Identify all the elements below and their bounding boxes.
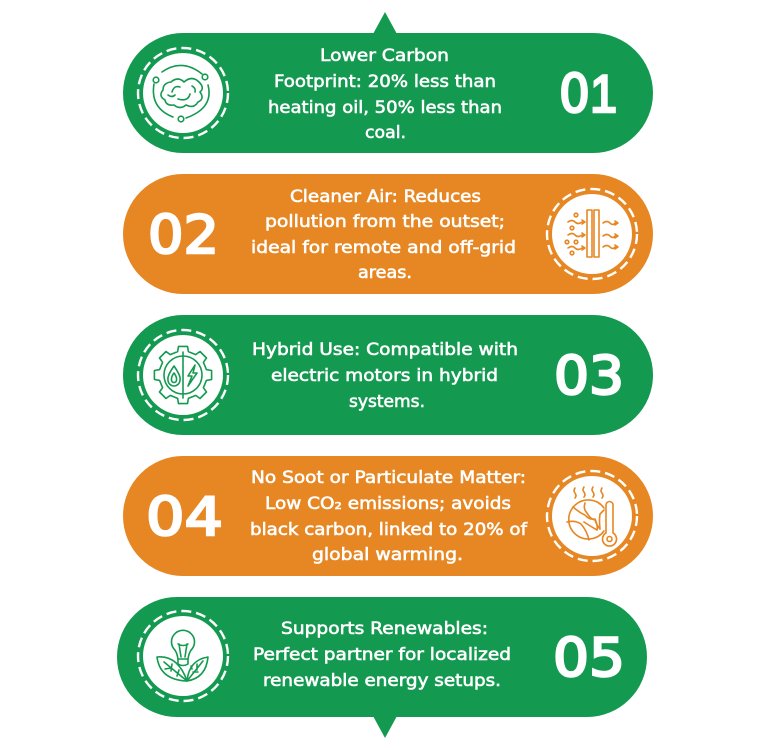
text: no soot: No Soot or Particulate Matter: bbox=[251, 468, 526, 488]
number 02: 02 bbox=[148, 205, 219, 266]
text: lower carbon footprint: Footprint: 20% less than bbox=[274, 72, 496, 92]
text: cleaner air: Cleaner Air: Reduces bbox=[290, 187, 481, 207]
text: no soot: black carbon, linked to 20% of bbox=[250, 520, 528, 540]
icon: cloud with orbit bbox=[138, 48, 228, 138]
text: hybrid use: electric motors in hybrid bbox=[271, 366, 498, 386]
text: supports renewables: renewable energy setups. bbox=[263, 671, 501, 691]
text: hybrid use bbox=[252, 340, 518, 412]
text: no soot: global warming. bbox=[312, 545, 463, 565]
number 04: 04 bbox=[146, 487, 223, 548]
text: cleaner air: ideal for remote and off-grid bbox=[251, 238, 516, 258]
icon: gear with drop and bolt bbox=[138, 330, 228, 420]
panel: hybrid use bbox=[123, 315, 653, 435]
top arrow bbox=[373, 12, 397, 34]
text: lower carbon footprint: heating oil, 50% less than bbox=[268, 98, 502, 118]
text: lower carbon footprint: coal. bbox=[365, 123, 406, 143]
text: no soot: Low CO₂ emissions; avoids bbox=[265, 494, 511, 514]
icon: air filter bbox=[547, 189, 637, 279]
text: hybrid use: Hybrid Use: Compatible with bbox=[252, 340, 518, 360]
text: no soot bbox=[250, 468, 528, 565]
text: supports renewables: Perfect partner for localized bbox=[253, 645, 511, 665]
text: lower carbon footprint: Lower Carbon bbox=[320, 46, 449, 66]
text: lower carbon footprint bbox=[268, 46, 502, 143]
number 05: 05 bbox=[553, 628, 625, 689]
text: cleaner air: areas. bbox=[358, 263, 412, 283]
text: hybrid use: systems. bbox=[349, 392, 425, 412]
text: cleaner air bbox=[251, 187, 516, 283]
panel: no soot bbox=[123, 456, 653, 576]
number 01: 01 bbox=[559, 64, 617, 125]
bottom arrow bbox=[373, 716, 397, 738]
text: supports renewables: Supports Renewables: bbox=[281, 619, 488, 639]
text: cleaner air: pollution from the outset; bbox=[265, 212, 505, 232]
number 03: 03 bbox=[554, 346, 624, 407]
panel: cleaner air bbox=[123, 174, 653, 294]
icon: earth with thermometer bbox=[547, 471, 637, 561]
panel: lower carbon footprint bbox=[123, 33, 653, 153]
text: supports renewables bbox=[253, 619, 511, 691]
icon: light bulb and leaves bbox=[138, 611, 228, 701]
panel: supports renewables bbox=[117, 597, 647, 717]
